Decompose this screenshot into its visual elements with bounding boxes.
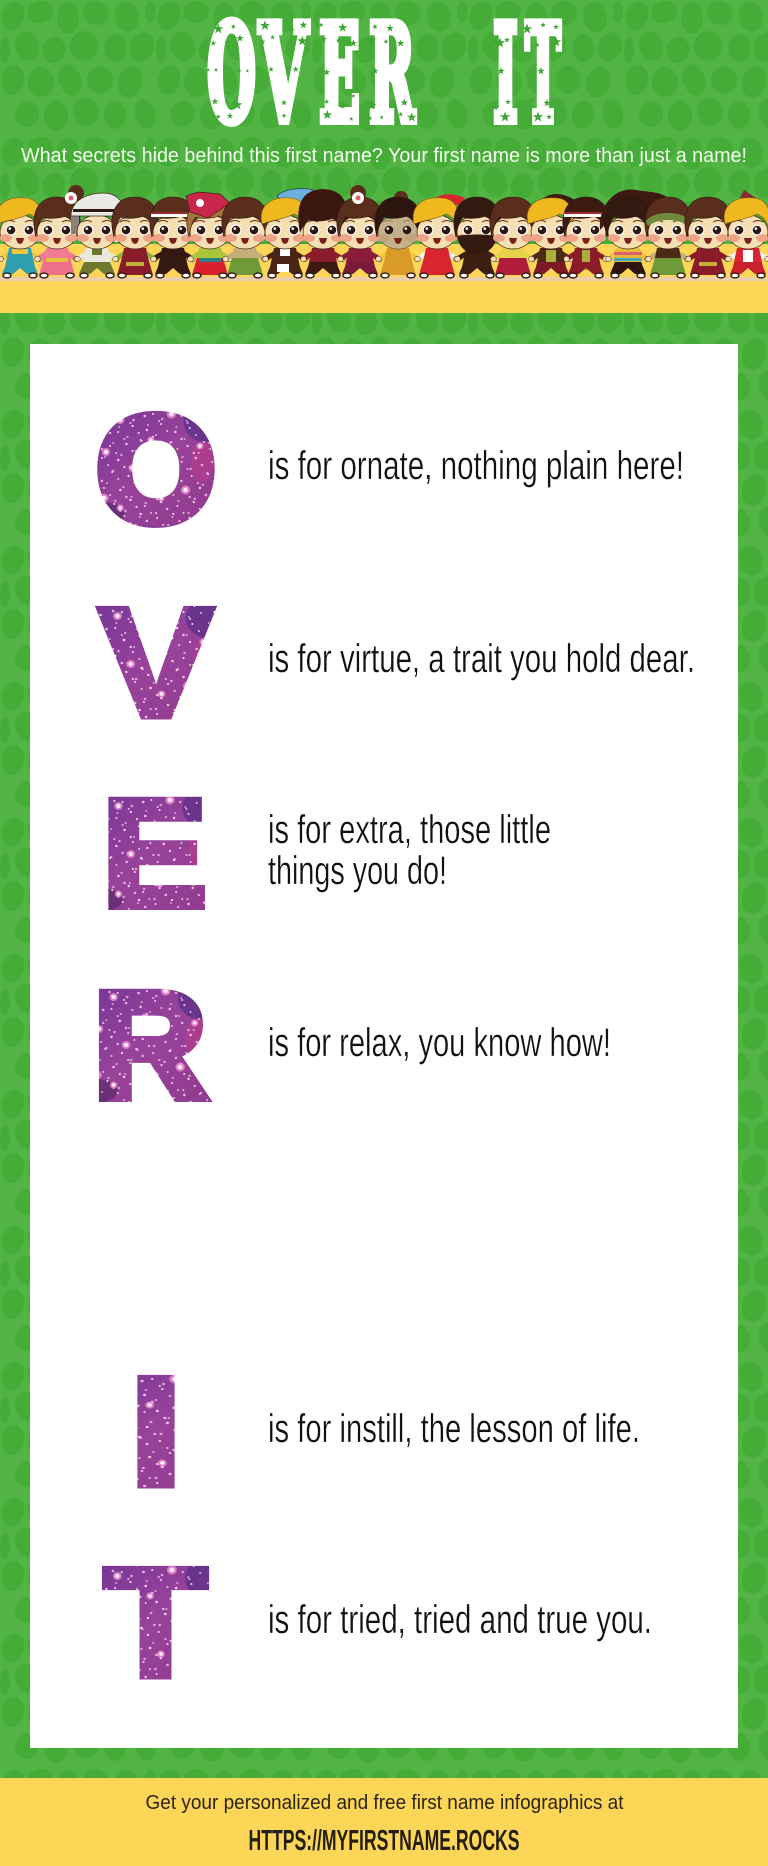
character 4 xyxy=(112,197,158,278)
character 6 xyxy=(186,192,233,278)
character 10 xyxy=(337,185,383,278)
yellow band behind characters xyxy=(0,244,768,313)
character 17 xyxy=(600,189,668,278)
letter T: T xyxy=(104,1536,207,1709)
character 7 xyxy=(222,197,268,278)
character 1 xyxy=(0,198,43,278)
footer band xyxy=(0,1778,768,1866)
text: I line: is for instill, the lesson of life. xyxy=(268,1407,640,1451)
character 16 xyxy=(563,197,609,278)
character 20 xyxy=(724,190,768,278)
text: E lines: things you do! xyxy=(268,849,447,893)
letter I: I xyxy=(129,1345,183,1518)
letter V: V xyxy=(99,576,213,749)
letter R: R xyxy=(94,962,206,1129)
text: R line: is for relax, you know how! xyxy=(268,1021,611,1065)
text: E lines xyxy=(268,808,551,893)
character 13 xyxy=(454,197,500,278)
character row xyxy=(0,185,768,281)
title: OVER IT xyxy=(206,0,561,152)
character 11 xyxy=(375,191,421,278)
character 12 xyxy=(413,194,465,278)
subtitle: What secrets hide behind this first name? Your first name is more than just a name! xyxy=(21,144,747,167)
character 18 xyxy=(645,197,691,278)
character 5 xyxy=(150,197,196,278)
character 8 xyxy=(261,189,317,278)
text: E lines: is for extra, those little xyxy=(268,808,551,852)
character 14 xyxy=(490,197,536,278)
panel: acrostic card xyxy=(30,344,738,1748)
footer url: HTTPS://MYFIRSTNAME.ROCKS xyxy=(248,1825,520,1857)
character 2 xyxy=(34,185,84,278)
character 3 xyxy=(71,193,124,278)
character 9 xyxy=(298,189,348,278)
letter E: E xyxy=(102,767,207,939)
letter O: O xyxy=(98,388,214,552)
footer text: Get your personalized and free first name infographics at xyxy=(146,1792,624,1814)
character 19 xyxy=(685,197,731,278)
character 15 xyxy=(527,194,575,278)
